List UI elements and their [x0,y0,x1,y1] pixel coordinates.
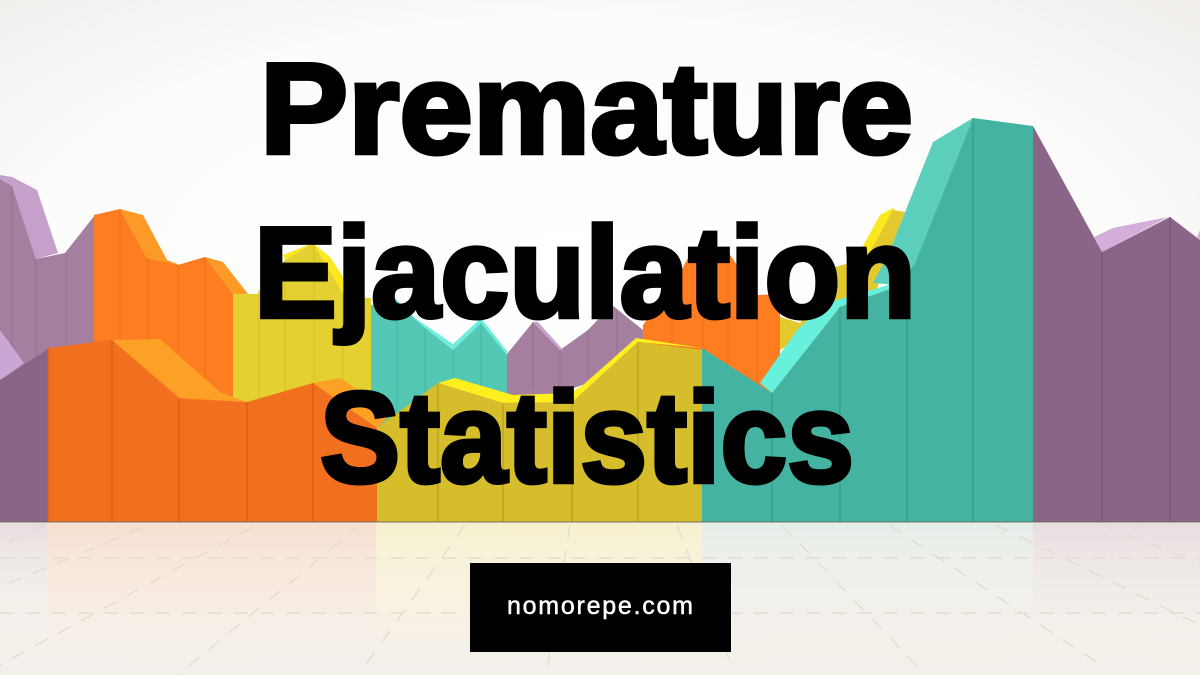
title line: Premature: Premature [260,37,913,181]
chart: large teal section [702,118,1033,522]
chart: front orange section [48,339,393,522]
website badge [470,563,731,652]
background wall [0,0,1200,525]
back purple section, left [0,175,95,385]
back orange section, right [643,248,780,395]
chart: front yellow section [377,338,702,522]
back teal section [371,296,507,430]
bar base shadow line [0,521,1200,523]
back purple section, centre [507,305,643,410]
title [254,37,916,510]
chart: back row of 3D area bars [0,175,905,430]
chart: front left purple section [0,330,48,522]
back yellow section, right [780,208,905,350]
title line: Ejaculation: Ejaculation [254,201,916,345]
title line: Statistics: Statistics [320,366,854,510]
chart: right purple section [1033,126,1200,522]
website address: nomorepe.com [507,592,693,620]
back yellow section [233,243,371,430]
floor with reflections and dashed tile lines [0,522,1200,675]
back orange section [94,209,248,420]
